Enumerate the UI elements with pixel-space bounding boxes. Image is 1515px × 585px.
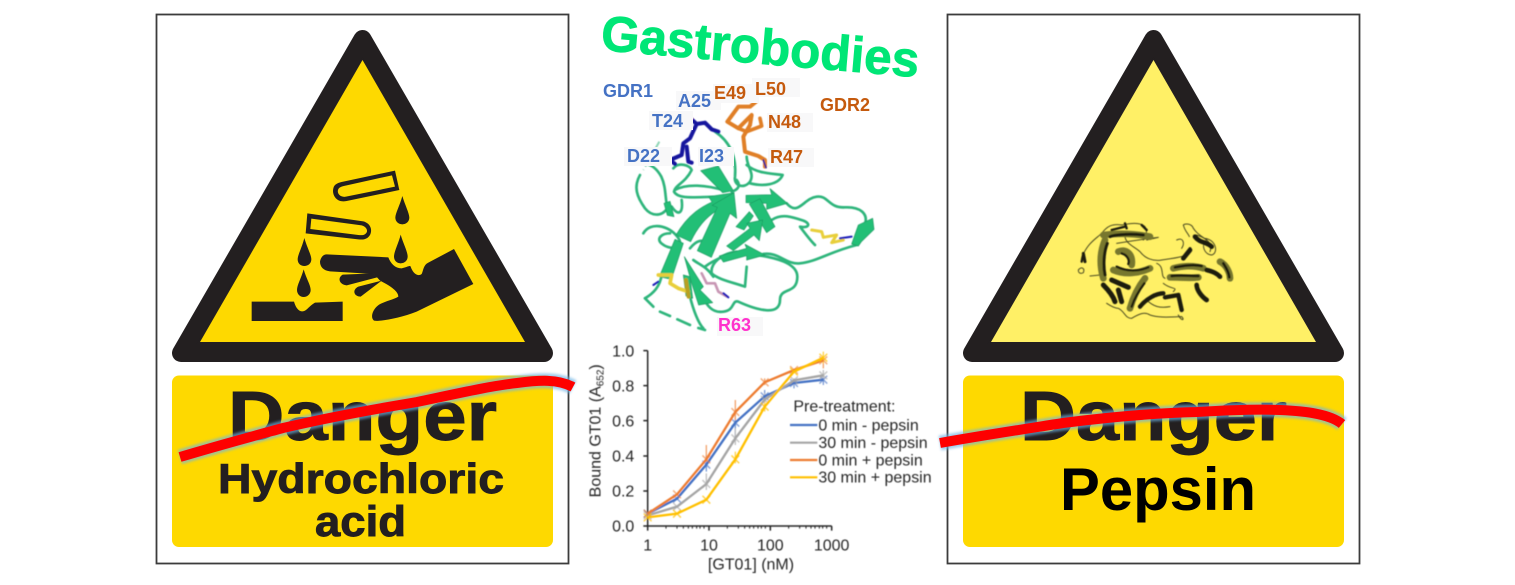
label: A25: A25 (678, 91, 711, 111)
label: GDR2: GDR2 (820, 95, 870, 115)
panel: hydrochloric acid warning sign (156, 14, 573, 564)
y axis tick labels: 0.2 (612, 483, 634, 500)
axes (643, 351, 832, 531)
series: 30 min - pepsin (648, 375, 823, 515)
labels: residue labels on structure (603, 78, 870, 336)
x axis tick labels: 1 (643, 537, 652, 554)
y axis tick labels: 0.6 (612, 413, 634, 430)
x axis tick labels: 10 (700, 537, 718, 554)
banner: danger hydrochloric acid (172, 376, 553, 547)
label: R63: R63 (718, 315, 751, 335)
legend: 0 min + pepsin (818, 452, 923, 469)
label backgrounds (624, 78, 814, 336)
word: Danger: Danger (1020, 377, 1287, 455)
red strike-through line over Danger (180, 381, 573, 457)
series: 0 min - pepsin (648, 380, 823, 514)
loops (636, 132, 866, 330)
title: Gastrobodies: Gastrobodies (599, 5, 922, 88)
x axis tick labels (643, 537, 850, 554)
icon: pepsin protein ribbon (1078, 223, 1230, 320)
GDR2 sticks in orange (727, 102, 766, 168)
y axis title: Bound GT01 (A (588, 386, 605, 497)
panel: pepsin warning sign (940, 14, 1360, 564)
y axis title: 652 (595, 369, 606, 386)
line chart: bound GT01 vs concentration (588, 343, 932, 574)
icon: corrosive hazard, test tubes dripping on surface and hand (252, 171, 473, 321)
protein structure: gastrobody ribbon model (636, 102, 874, 330)
label: R47: R47 (770, 147, 803, 167)
error bars (706, 352, 823, 490)
legend: 30 min + pepsin (818, 470, 932, 487)
label: L50: L50 (755, 79, 786, 99)
word: Hydrochloric: Hydrochloric (218, 455, 504, 502)
y axis tick labels: 1.0 (612, 343, 634, 360)
label: T24: T24 (652, 111, 683, 131)
disulfide and side-chain sticks (653, 230, 852, 297)
label: N48: N48 (768, 112, 801, 132)
GDR1 sticks in blue (666, 117, 718, 164)
y axis tick labels: 0.8 (612, 378, 634, 395)
y axis tick labels: 0.4 (612, 448, 634, 465)
warning triangle: pepsin (972, 39, 1335, 353)
legend (790, 399, 932, 487)
banner: danger pepsin (963, 376, 1344, 547)
y axis tick labels: 0.0 (612, 518, 634, 535)
word: acid: acid (315, 498, 406, 546)
x axis tick labels: 1000 (814, 537, 850, 554)
x axis title: [GT01] (nM) (708, 557, 794, 574)
label: GDR1: GDR1 (603, 81, 653, 101)
label: I23: I23 (699, 146, 724, 166)
y axis tick labels (612, 343, 634, 535)
beta strands (659, 166, 874, 305)
x axis tick labels: 100 (757, 537, 784, 554)
word: Danger: Danger (228, 377, 497, 455)
legend: 0 min - pepsin (818, 417, 919, 434)
warning triangle: corrosive (181, 39, 544, 353)
label: D22: D22 (627, 146, 660, 166)
label: E49: E49 (714, 83, 746, 103)
legend: 30 min - pepsin (818, 435, 928, 452)
series: 0 min + pepsin (648, 360, 823, 514)
legend: Pre-treatment: (793, 399, 896, 416)
word: Pepsin: Pepsin (1060, 456, 1256, 523)
red strike-through line over Danger (940, 410, 1342, 443)
series: 30 min + pepsin (648, 358, 823, 517)
y axis title: ) (588, 364, 605, 370)
